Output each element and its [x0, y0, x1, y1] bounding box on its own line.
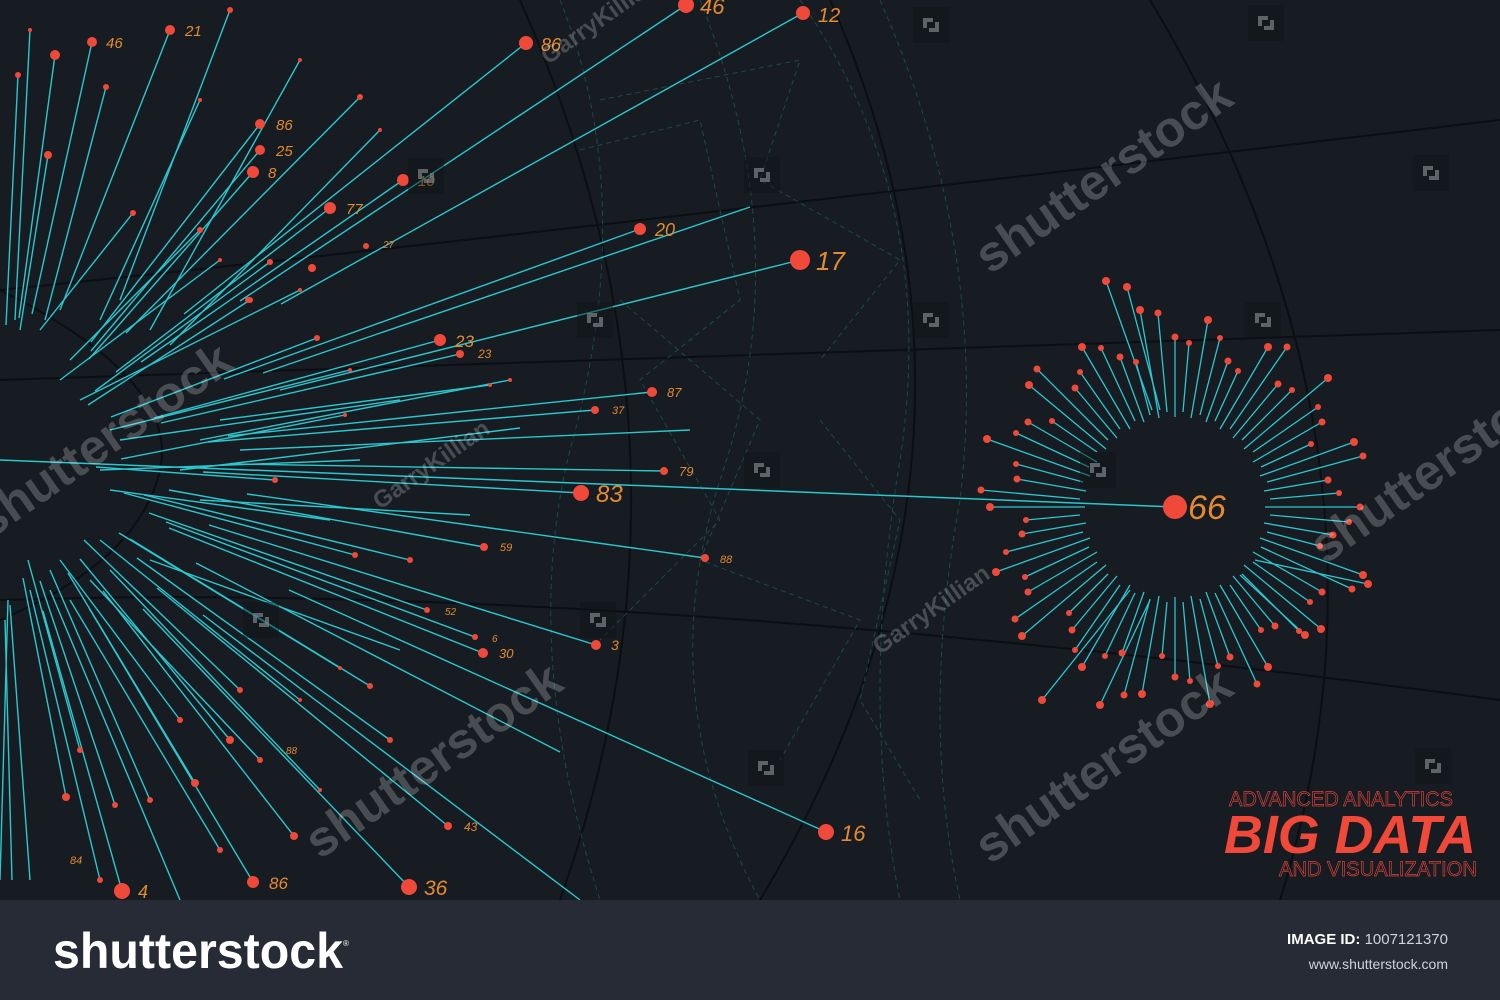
data points left — [15, 0, 834, 899]
data labels left: 36 — [424, 877, 448, 900]
title block — [1224, 788, 1477, 881]
data labels left: 12 — [818, 5, 840, 27]
data labels left: 21 — [184, 23, 202, 40]
data labels left: 43 — [464, 820, 478, 834]
title block: ADVANCED ANALYTICS — [1229, 788, 1453, 811]
data labels left: 17 — [816, 246, 846, 276]
data labels left: 16 — [841, 821, 866, 846]
data labels left: 46 — [106, 35, 123, 52]
watermarks: GarryKillian — [868, 560, 995, 660]
data labels left: 20 — [654, 220, 675, 240]
satellite cluster 66: 66 — [1188, 489, 1226, 527]
data labels left: 3 — [611, 637, 619, 653]
data labels left: 37 — [612, 405, 625, 417]
data labels left: 88 — [286, 746, 298, 757]
data labels left: 86 — [276, 117, 293, 134]
data labels left: 23 — [454, 332, 474, 351]
data labels left: 4 — [138, 882, 148, 902]
watermarks: shutterstock — [964, 656, 1242, 874]
satellite cluster 66 — [0, 277, 1372, 709]
watermark icons — [243, 5, 1451, 786]
title block: AND VISUALIZATION — [1279, 858, 1477, 881]
left data burst — [0, 5, 826, 900]
footer bar: www.shutterstock.com — [1308, 956, 1448, 972]
data labels left: 87 — [667, 385, 682, 400]
footer bar: ® — [343, 939, 349, 948]
title block: BIG DATA — [1224, 805, 1476, 865]
footer bar: shutterstock — [53, 923, 343, 979]
data labels left: 8 — [268, 165, 277, 182]
watermarks: shutterstock — [294, 651, 572, 869]
data labels left: 86 — [541, 35, 562, 55]
data labels left: 25 — [275, 143, 293, 160]
watermarks: shutterstock — [964, 66, 1242, 284]
data labels left: 88 — [720, 554, 733, 566]
data labels left: 77 — [346, 201, 363, 218]
data labels left: 84 — [70, 855, 82, 867]
data labels left: 6 — [492, 634, 498, 645]
data labels left: 86 — [269, 874, 288, 893]
data labels left: 10 — [418, 173, 435, 190]
data labels left: 27 — [382, 240, 395, 251]
data labels left: 59 — [500, 542, 512, 554]
data labels left — [70, 0, 866, 902]
footer bar — [0, 900, 1500, 1000]
data labels left: 30 — [499, 646, 514, 661]
footer bar: IMAGE ID: 1007121370 — [1287, 931, 1448, 948]
data labels left: 83 — [596, 481, 623, 508]
data labels left: 52 — [445, 607, 457, 618]
data labels left: 79 — [679, 464, 693, 479]
data labels left: 23 — [477, 347, 492, 361]
watermarks: GarryKillian — [368, 415, 495, 515]
